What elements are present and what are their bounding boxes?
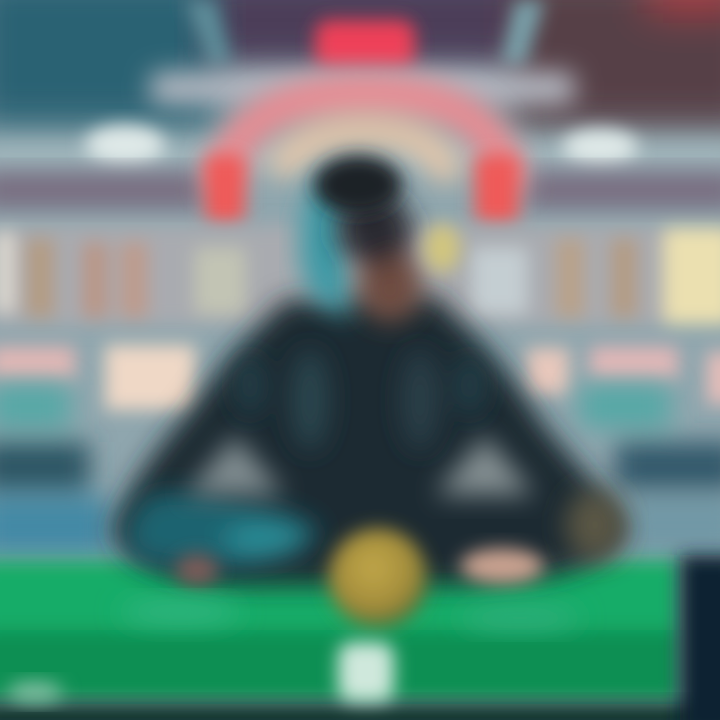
bottom-left white mark — [7, 681, 63, 703]
person: dark hair — [314, 155, 402, 215]
golden ball — [328, 528, 428, 628]
decorative light beams — [185, 0, 545, 65]
white stack on table — [338, 642, 394, 702]
white lamp blobs — [85, 125, 638, 165]
person: chest emblems — [185, 435, 535, 495]
person: teal sleeve — [126, 492, 320, 569]
table highlights — [120, 600, 580, 630]
person: hands — [175, 548, 544, 586]
person: brown right elbow — [565, 490, 625, 560]
person — [112, 155, 625, 586]
person: jacket highlights — [236, 350, 484, 450]
person: hoodie body — [112, 295, 625, 585]
dark corner panel — [680, 555, 720, 720]
yellow accent behind shoulder — [424, 224, 460, 272]
mauve fascia bands — [0, 172, 720, 208]
red roof sign — [315, 20, 415, 70]
background: upper wall — [0, 0, 720, 130]
lower facade windows — [0, 225, 720, 325]
person: teal hood side — [299, 180, 350, 320]
table bottom edge — [0, 704, 720, 720]
pale canopy band — [0, 72, 720, 168]
teal counters — [0, 385, 720, 555]
person: face — [337, 195, 422, 323]
arch red pillars — [205, 155, 519, 225]
arch sign — [222, 92, 508, 190]
pink signs row — [0, 345, 720, 410]
green table — [0, 560, 680, 702]
